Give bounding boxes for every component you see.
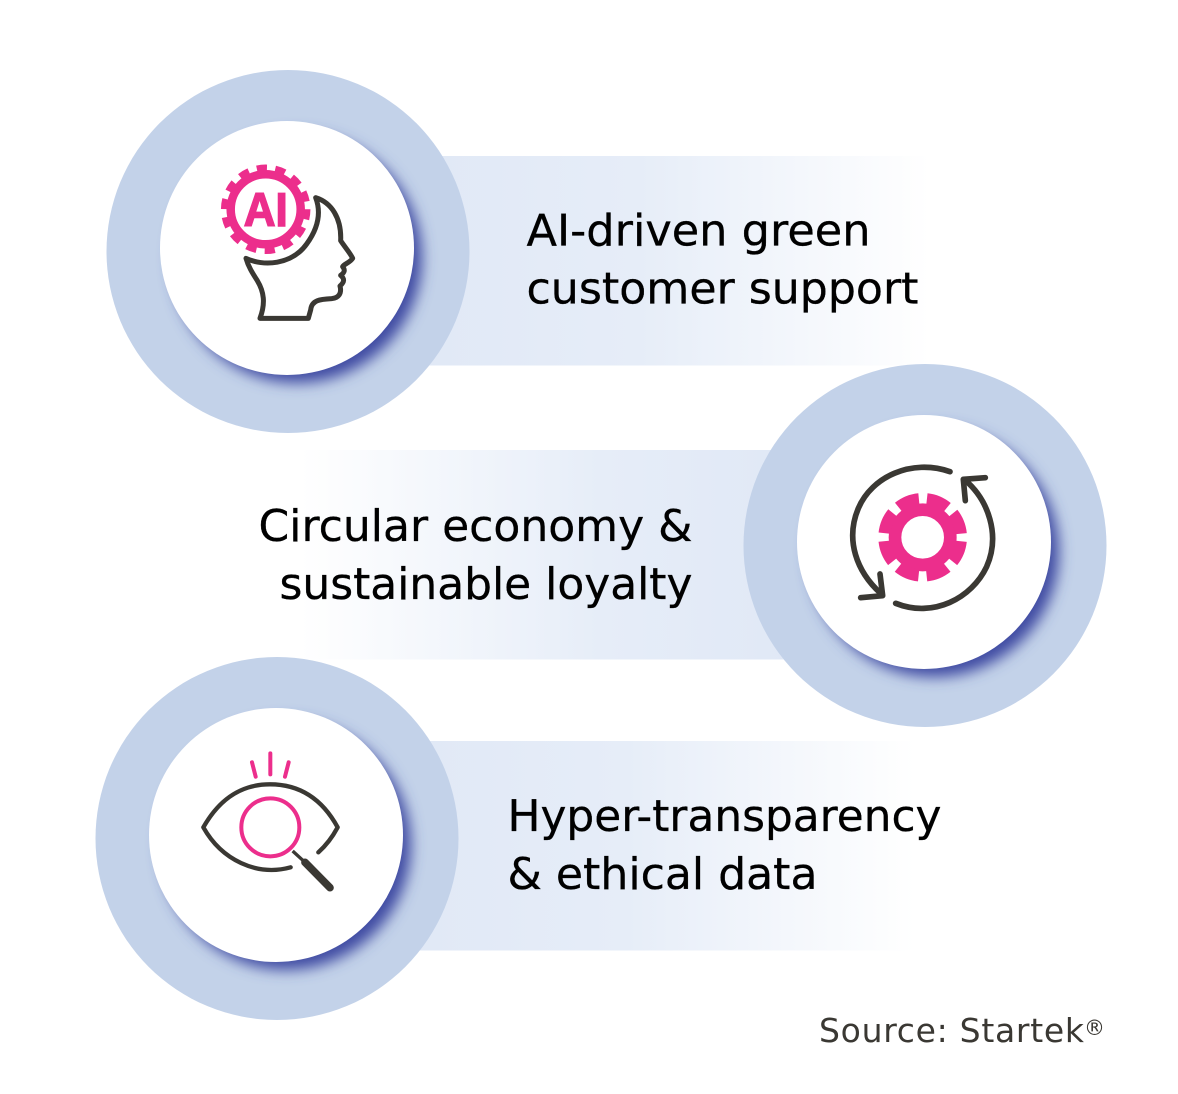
text: Hyper-transparency and ethical data: & ethical data xyxy=(508,849,818,900)
icon: eye with magnifier xyxy=(203,753,338,888)
text: Circular economy and sustainable loyalty xyxy=(258,501,692,610)
source note: ® xyxy=(1084,1016,1105,1040)
icon: AI gear and head xyxy=(225,169,353,318)
band: row 1 xyxy=(400,156,930,366)
text: Hyper-transparency and ethical data xyxy=(508,791,942,900)
text: Circular economy and sustainable loyalty: sustainable loyalty xyxy=(280,559,692,610)
circle badge: circular economy xyxy=(744,364,1106,727)
source note: Source: Startek xyxy=(819,1011,1085,1050)
text: Hyper-transparency and ethical data: Hyper-transparency xyxy=(508,791,942,842)
icon: AI gear and head: AI xyxy=(244,183,288,236)
text: AI-driven green customer support: AI-driven green xyxy=(526,206,870,256)
circle badge: transparency xyxy=(96,657,458,1020)
band: row 3 xyxy=(390,741,915,950)
circle badge: AI xyxy=(106,70,470,433)
icon: gear with circular arrows xyxy=(853,467,993,608)
text: AI-driven green customer support xyxy=(526,206,918,314)
text: AI-driven green customer support: customer support xyxy=(526,264,918,314)
band: row 2 xyxy=(300,450,800,660)
text: Circular economy and sustainable loyalty: Circular economy & xyxy=(258,501,692,552)
